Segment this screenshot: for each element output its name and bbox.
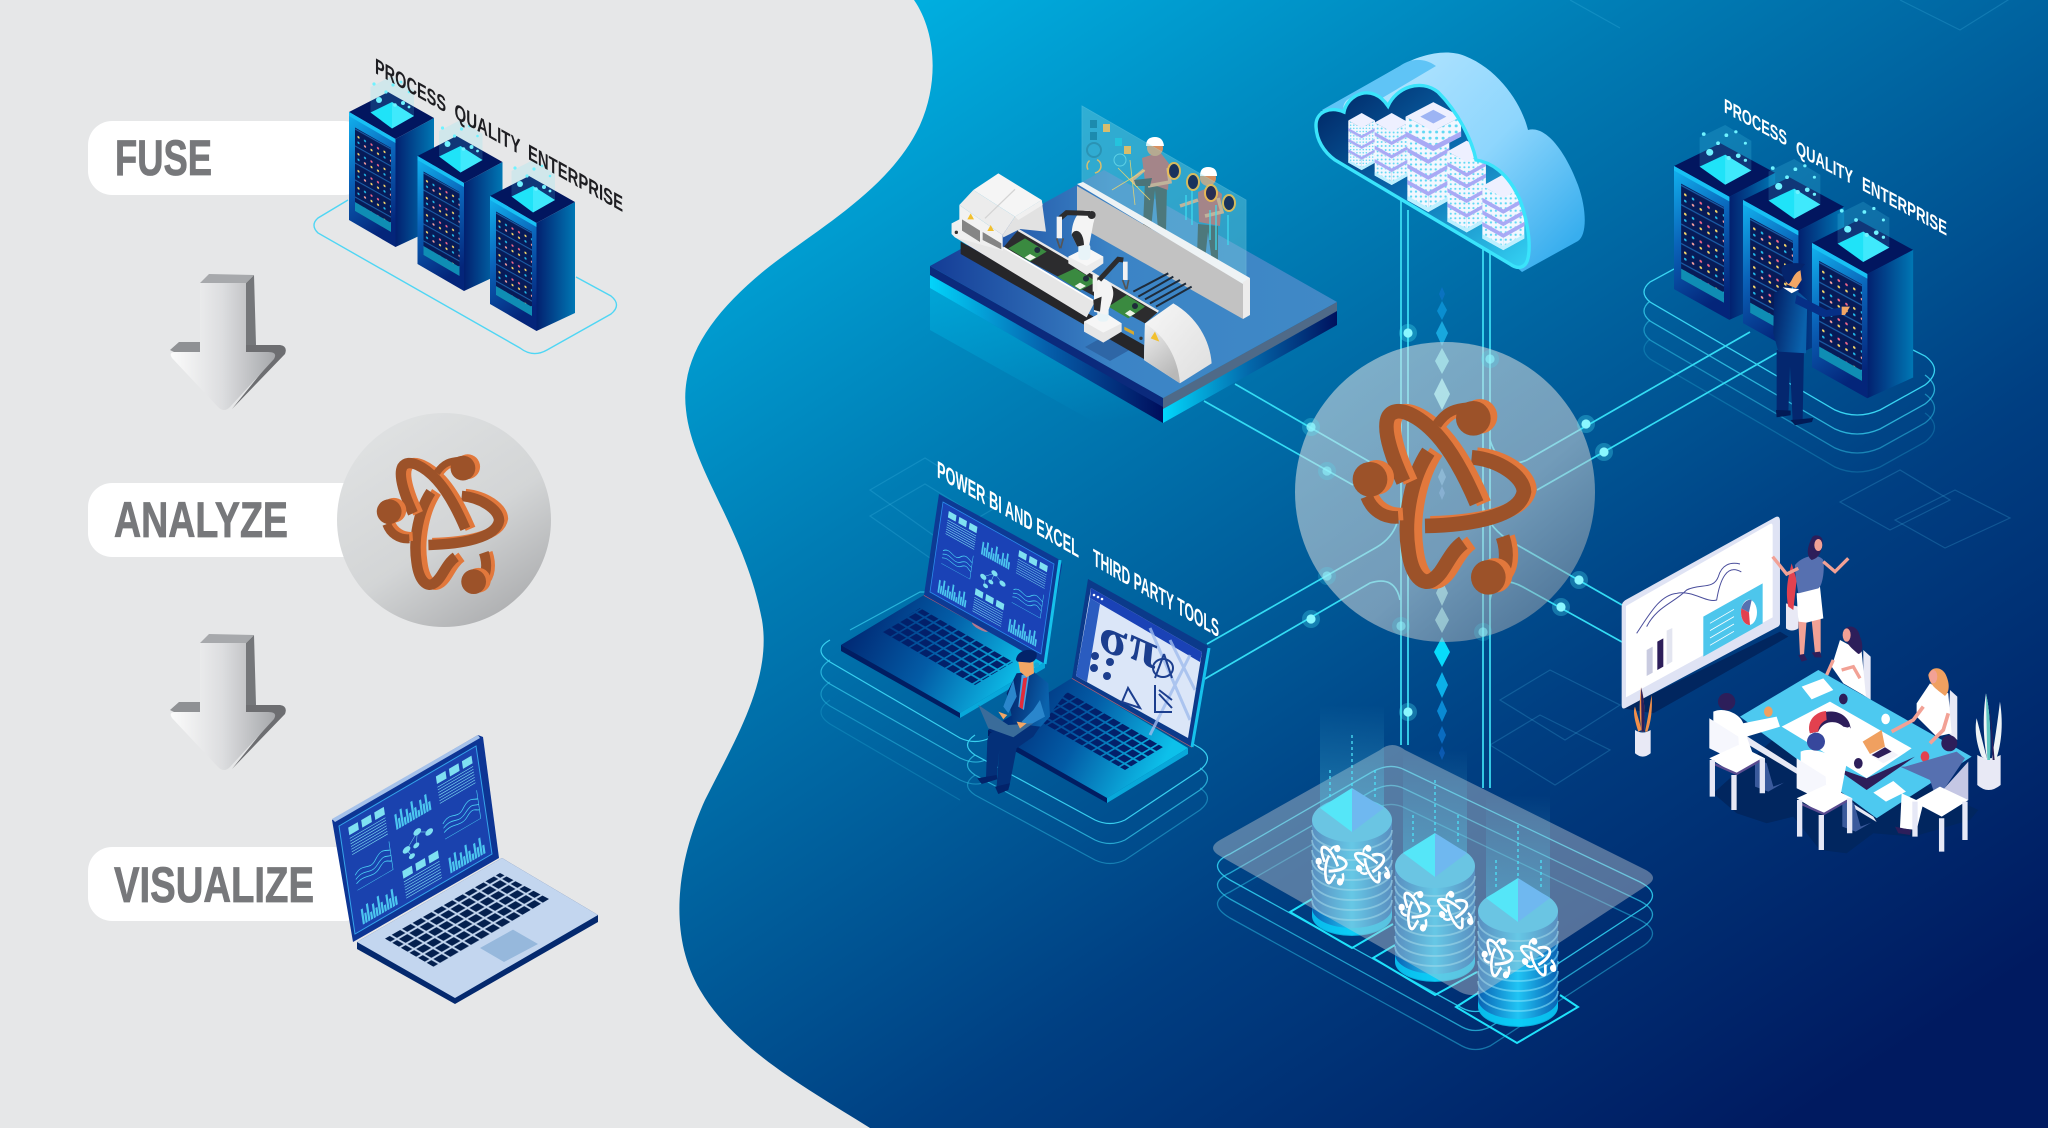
left rack labels: ENTERPRISE — [528, 140, 623, 218]
right rack labels: ENTERPRISE — [1862, 172, 1947, 241]
glass hud panel — [1082, 106, 1246, 277]
label: VISUALIZE: VISUALIZE — [114, 857, 314, 913]
database cylinders — [1312, 798, 1558, 1027]
workers — [1132, 137, 1222, 264]
robot arm 1 — [1057, 210, 1103, 275]
seated person — [977, 650, 1050, 794]
laptop labels: THIRD PARTY TOOLS — [1093, 545, 1219, 643]
right woman — [1892, 668, 1952, 743]
left server racks — [349, 76, 575, 331]
far chairs — [1863, 650, 1957, 740]
laptops platform lines — [821, 592, 1208, 864]
meeting scene — [1622, 517, 2002, 853]
screen tool icons — [1122, 654, 1173, 712]
central sphere — [1295, 342, 1595, 642]
database footprints — [1290, 899, 1578, 1043]
cloud — [1316, 53, 1585, 272]
central atom logo — [1367, 407, 1529, 582]
person at server — [1773, 263, 1850, 425]
right rack labels: QUALITY — [1796, 136, 1853, 189]
laptop: third party tools: π — [1127, 613, 1160, 681]
right plant — [1976, 693, 2002, 790]
left rack labels: PROCESS — [375, 54, 446, 118]
left rack labels — [375, 54, 623, 218]
vertical cloud lines — [1401, 200, 1490, 788]
right seated man — [1895, 735, 1968, 852]
presenter — [1773, 535, 1848, 662]
database under-layers — [1218, 766, 1652, 1050]
conveyor line — [952, 173, 1212, 383]
top woman — [1827, 626, 1866, 697]
label: VISUALIZE — [88, 847, 368, 921]
left laptop — [332, 735, 598, 1004]
connection lines — [1203, 332, 1777, 680]
robot arm 2 — [1084, 259, 1129, 343]
laptop labels: POWER BI AND EXCEL — [937, 457, 1079, 564]
laptop: third party tools: σ — [1097, 604, 1130, 672]
presentation board — [1622, 517, 1780, 709]
front seated man — [1797, 727, 1871, 850]
decorative background lozenges — [870, 0, 2040, 785]
glowing junction dots — [1302, 324, 1613, 721]
right machine — [1144, 303, 1212, 383]
label: ANALYZE: ANALYZE — [114, 492, 288, 548]
database prisms and light beams — [1320, 705, 1550, 922]
right server racks — [1674, 125, 1913, 398]
analyze sphere with logo — [337, 413, 551, 627]
left seated man — [1709, 693, 1784, 810]
right server platform lines — [1644, 269, 1934, 472]
arrow: fuse to analyze — [170, 274, 286, 410]
left machine — [952, 173, 1046, 251]
right rack labels — [1724, 94, 1947, 241]
right rack labels: PROCESS — [1724, 94, 1787, 151]
meeting table — [1740, 670, 1972, 822]
label: FUSE — [88, 121, 368, 195]
cable rods — [1133, 273, 1192, 307]
cloud data stacks — [1348, 102, 1524, 250]
left rack labels: QUALITY — [454, 99, 521, 161]
factory platform — [930, 106, 1337, 442]
data diamonds — [1434, 287, 1450, 760]
arrow: analyze to visualize — [170, 634, 286, 770]
left plant — [1634, 687, 1652, 757]
back wall — [1077, 186, 1243, 319]
label: ANALYZE — [88, 483, 368, 557]
label: FUSE: FUSE — [115, 130, 212, 186]
background: blue wave panel — [679, 0, 2048, 1128]
white logos on cylinders — [1318, 842, 1559, 980]
laptop: power bi — [841, 494, 1062, 718]
laptop: third party tools — [988, 579, 1210, 803]
translucent database plate — [1213, 745, 1653, 995]
left server outline platform — [314, 200, 616, 354]
